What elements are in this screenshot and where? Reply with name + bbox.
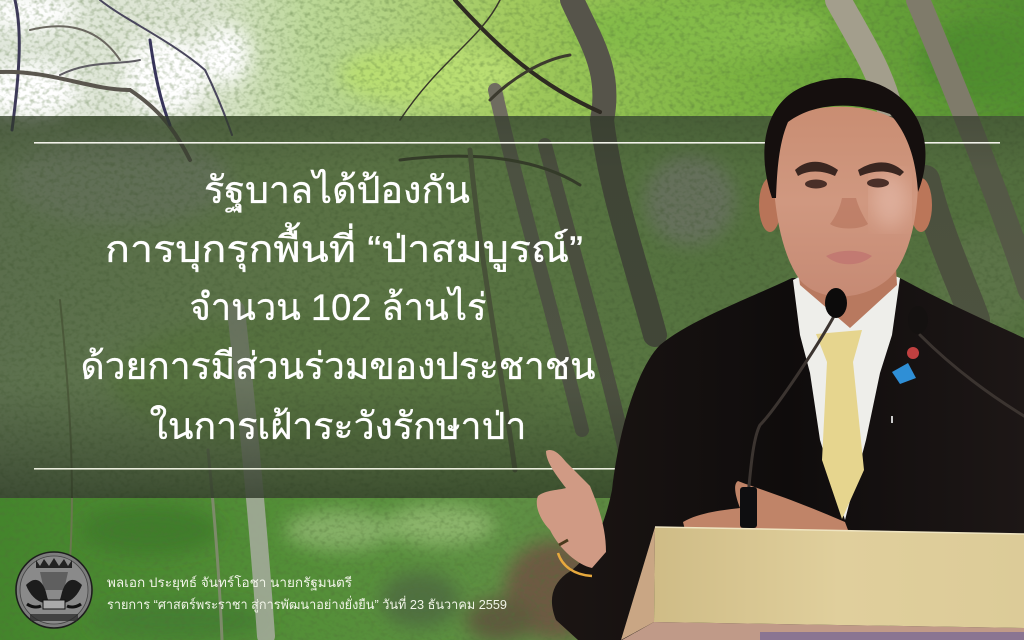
headline: รัฐบาลได้ป้องกัน [204,169,470,213]
eyes [805,180,827,188]
microphone stems [748,318,1024,495]
podium front [654,527,1024,628]
podium [621,527,1024,640]
dark translucent text band [0,116,1024,498]
microphone base [740,487,757,528]
nose shadow [830,198,868,228]
ears [759,178,781,232]
tie [816,330,864,519]
podium top edge [655,527,1024,534]
caption: พลเอก ประยุทธ์ จันทร์โอชา นายกรัฐมนตรี [107,575,352,591]
hair [764,78,926,198]
mouth [826,251,872,264]
icon: government seal [16,552,92,628]
headline: การบุกรุกพื้นที่ “ป่าสมบูรณ์” [105,222,583,272]
caption [107,575,507,613]
headline: จำนวน 102 ล้านไร่ [190,286,486,328]
caption: รายการ “ศาสตร์พระราชา สู่การพัฒนาอย่างยั่งยืน” วันที่ 23 ธันวาคม 2559 [107,596,507,613]
podium underside [622,622,1024,640]
face [773,107,918,296]
ring [559,540,568,545]
headline: ในการเฝ้าระวังรักษาป่า [150,405,526,447]
wristband [558,553,592,576]
microphone left head [825,288,847,318]
headline [80,169,596,447]
cheek highlight [872,172,908,228]
resting hand [683,481,848,530]
neck [795,250,897,328]
bottom rule [34,468,619,470]
suit jacket [552,278,1024,640]
microphone right head [908,306,928,334]
top rule [34,142,1000,144]
pins [907,347,919,359]
eyebrows [795,162,904,176]
pointing hand [537,450,606,568]
shirt collar [793,270,900,520]
podium side [621,527,655,640]
headline: ด้วยการมีส่วนร่วมของประชาชน [80,345,596,387]
person: prime minister at podium [537,78,1024,640]
